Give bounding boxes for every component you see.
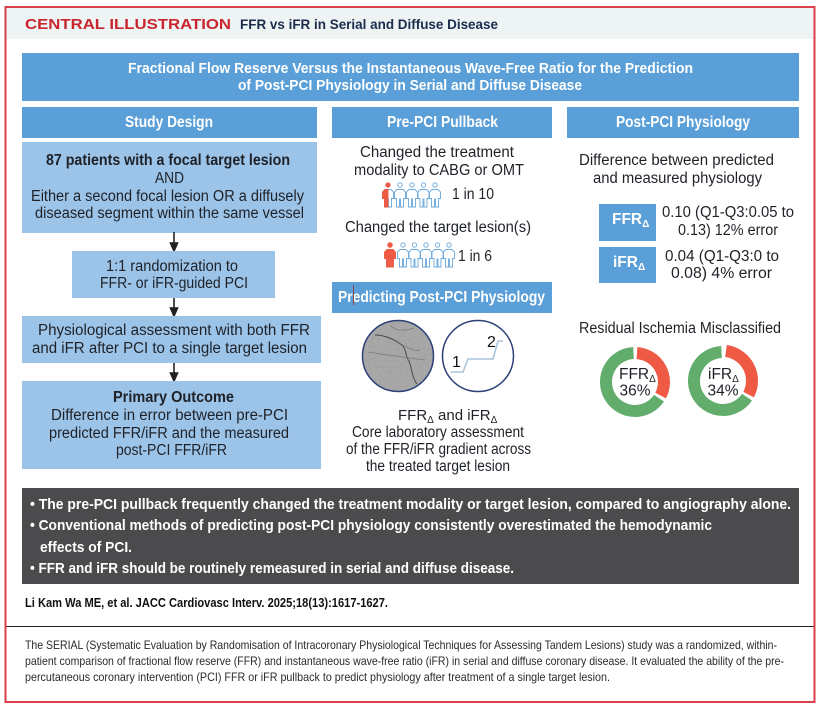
heading: post-PCI physiology: Post-PCI Physiology (616, 114, 750, 131)
box: primary outcome: Difference in error between pre-PCI (51, 407, 288, 424)
main title banner (22, 53, 799, 101)
heading: predicting post-PCI physiology: Predicting Post-PCI Physiology (338, 289, 545, 306)
heading: residual ischemia: Residual Ischemia Misclassified (579, 320, 781, 337)
caption: percutaneous coronary intervention (PCI) FFR or iFR pullback to predict physiology after treatment of a single target lesion. (25, 670, 610, 684)
panel: pre-PCI pullback (332, 107, 552, 267)
text: core lab assessment: Δ (427, 415, 434, 426)
donut chart: FFR delta 36%: 36% (620, 382, 651, 400)
icon: pressure pullback curve: 2 (487, 334, 496, 351)
badge: FFR delta: Δ (642, 219, 649, 230)
donut chart: iFR delta 34% (694, 351, 752, 410)
icon: people 1 in 10 (382, 183, 440, 207)
donut chart: FFR delta 36%: Δ (649, 374, 656, 385)
text: difference: and measured physiology (593, 170, 762, 187)
text: core lab assessment: FFR (398, 407, 427, 424)
badge: iFR delta: Δ (638, 262, 645, 273)
text: core lab assessment: Core laboratory assessment (352, 424, 525, 441)
text: changed treatment modality (354, 144, 525, 179)
box: patients: AND (155, 170, 184, 187)
heading: study design: Study Design (125, 114, 213, 131)
value: iFR delta (665, 248, 779, 282)
box: randomization: FFR- or iFR-guided PCI (100, 275, 248, 292)
badge: iFR delta: iFR (613, 254, 638, 271)
text: core lab assessment (346, 407, 531, 475)
box: primary outcome: post-PCI FFR/iFR (116, 442, 227, 459)
donut chart: iFR delta 34%: Δ (732, 374, 739, 385)
header title: FFR vs iFR in Serial and Diffuse Disease (240, 16, 498, 32)
value: FFR delta (662, 204, 794, 239)
donut chart: iFR delta 34%: 34% (708, 382, 739, 400)
box: randomization (72, 251, 275, 298)
panel: key takeaways: • Conventional methods of predicting post-PCI physiology consistently overestimated the hemodynamic (30, 517, 712, 534)
box: patients (22, 142, 317, 233)
box: randomization: 1:1 randomization to (106, 258, 238, 275)
icon: pressure pullback curve: 1 (452, 354, 461, 371)
stat: 1 in 6: 1 in 6 (458, 248, 492, 265)
box: primary outcome: Primary Outcome (113, 389, 234, 406)
arrow (170, 363, 178, 381)
box: patients: Either a second focal lesion OR a diffusely (31, 188, 304, 205)
citation: Li Kam Wa ME, et al. JACC Cardiovasc Interv. 2025;18(13):1617-1627. (25, 595, 388, 610)
donut chart: iFR delta 34%: iFR (708, 366, 732, 383)
heading: pre-PCI pullback: Pre-PCI Pullback (387, 114, 498, 131)
arrow (170, 232, 178, 251)
text: difference: Difference between predicted (579, 152, 774, 169)
panel: key takeaways: • FFR and iFR should be routinely remeasured in serial and diffuse disease. (30, 560, 514, 577)
text: core lab assessment: Δ (491, 415, 498, 426)
badge: FFR delta (599, 204, 656, 241)
main title banner: Fractional Flow Reserve Versus the Instantaneous Wave-Free Ratio for the Prediction (128, 60, 693, 77)
icon: pressure pullback curve (442, 320, 514, 392)
panel: post-PCI physiology (567, 107, 799, 411)
value: iFR delta: 0.08) 4% error (671, 265, 772, 282)
text: core lab assessment: and iFR (434, 407, 491, 424)
header label: CENTRAL ILLUSTRATION (25, 16, 231, 33)
box: primary outcome: predicted FFR/iFR and the measured (49, 425, 289, 442)
heading: study design (22, 107, 317, 138)
box: primary outcome (22, 381, 321, 469)
panel: key takeaways: effects of PCI. (40, 539, 132, 556)
heading: predicting post-PCI physiology (332, 282, 552, 313)
box: patients: 87 patients with a focal target lesion (46, 152, 290, 169)
arrow (170, 298, 178, 316)
heading: pre-PCI pullback (332, 107, 552, 138)
icon: angiogram (362, 320, 434, 392)
text: changed treatment modality: modality to CABG or OMT (354, 162, 525, 179)
box: patients: diseased segment within the same vessel (35, 205, 304, 222)
text: changed treatment modality: Changed the treatment (360, 144, 515, 161)
badge: FFR delta: FFR (612, 211, 642, 228)
panel: study design (22, 107, 321, 469)
main title banner: of Post-PCI Physiology in Serial and Diffuse Disease (238, 77, 582, 94)
header band (6, 8, 814, 39)
panel: predicting post-PCI physiology (332, 282, 552, 475)
text: core lab assessment: the treated target lesion (366, 458, 510, 475)
heading: post-PCI physiology (567, 107, 799, 138)
icon: people 1 in 6 (384, 243, 454, 267)
panel: key takeaways (22, 488, 799, 584)
value: iFR delta: 0.04 (Q1-Q3:0 to (665, 248, 779, 265)
text: changed target lesion: Changed the target lesion(s) (345, 219, 531, 236)
box: physiological assessment: and iFR after PCI to a single target lesion (32, 340, 307, 357)
stat: 1 in 10: 1 in 10 (452, 186, 494, 203)
value: FFR delta: 0.13) 12% error (678, 222, 778, 239)
text: difference (579, 152, 774, 187)
donut chart: FFR delta 36%: FFR (619, 366, 649, 383)
donut chart: FFR delta 36% (606, 353, 664, 411)
caption (25, 638, 784, 684)
value: FFR delta: 0.10 (Q1-Q3:0.05 to (662, 204, 794, 221)
text: core lab assessment: of the FFR/iFR gradient across (346, 441, 531, 458)
box: physiological assessment (22, 316, 321, 363)
box: physiological assessment: Physiological assessment with both FFR (38, 322, 310, 339)
badge: iFR delta (599, 247, 656, 283)
